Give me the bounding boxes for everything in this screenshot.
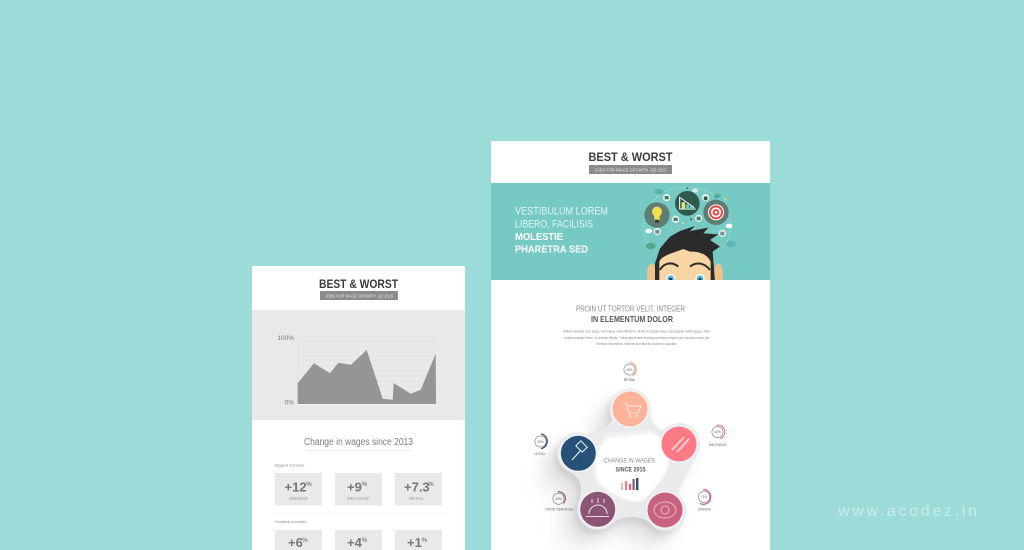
eyebrows xyxy=(660,263,710,270)
stat: drivers: +12 xyxy=(284,480,307,494)
hair xyxy=(655,226,720,282)
icon: chart badge xyxy=(675,191,700,216)
gauge: legal: LEGAL xyxy=(535,452,546,456)
chart panel background xyxy=(252,310,465,420)
area chart xyxy=(277,335,437,406)
node: legal gavel xyxy=(559,434,597,472)
cast shadow xyxy=(535,393,697,550)
heading: change in wages: Change in wages since 2013 xyxy=(304,437,413,448)
gauge: food services: 40% xyxy=(555,497,562,501)
eyes xyxy=(666,274,705,283)
stat: smallest three: % xyxy=(422,537,428,544)
panel: right card xyxy=(491,141,770,550)
gauge: retail: RETAIL xyxy=(624,378,635,382)
node: mechanic tools xyxy=(660,425,698,463)
heading: proin: PROIN UT TORTOR VELIT, INTEGER xyxy=(576,304,685,314)
icon: light bulb xyxy=(644,202,670,228)
hero text: PHARETRA SED xyxy=(515,244,588,256)
ears xyxy=(647,264,656,285)
heading: elementum: IN ELEMENTUM DOLOR xyxy=(591,314,673,324)
illustration: thinking character xyxy=(644,187,736,285)
gauge: retail xyxy=(624,362,636,382)
icon: target xyxy=(703,200,729,225)
gauge: driver: DRIVER xyxy=(698,508,711,512)
stat: smallest two xyxy=(335,530,382,550)
ring body xyxy=(557,389,700,531)
stat: mechanic xyxy=(335,473,382,506)
stat: retail xyxy=(395,473,442,506)
gauge: driver xyxy=(698,489,711,512)
stat: mechanic: MECHANIC xyxy=(347,496,370,501)
area chart: 100% xyxy=(277,335,294,342)
heading: left title: BEST & WORST xyxy=(319,277,399,291)
center label: SINCE 2015 xyxy=(616,466,646,474)
stat: drivers: % xyxy=(306,481,312,488)
stat: smallest two: % xyxy=(362,537,368,544)
paragraph: Nullam molestie arcu turpis, vel tempus nulla efficitur in. Morbi ut sodales lacus. Sed aliquet mattis augue. Nam xyxy=(563,330,710,334)
area chart: 0% xyxy=(285,400,294,406)
gauge: legal xyxy=(535,434,547,456)
stat: mechanic: +9 xyxy=(347,480,362,494)
full scene xyxy=(252,141,976,550)
stat: mechanic: % xyxy=(362,481,368,488)
node: retail cart xyxy=(611,390,649,428)
paragraph xyxy=(563,330,710,346)
gauge: mechanic: 60% xyxy=(714,430,721,434)
stat: retail: RETAIL xyxy=(409,496,424,501)
tag: right subtitle: JOBS FOR WAGE GROWTH -Q2 2015 xyxy=(594,168,667,173)
stat: drivers xyxy=(275,473,322,506)
tag: left subtitle: JOBS FOR WAGE GROWTH -Q2 2015 xyxy=(325,294,393,299)
hero text: LIBERO, FACILISIS xyxy=(515,218,593,230)
hero band xyxy=(491,183,770,280)
gauge: driver: 75% xyxy=(701,495,707,499)
stat: retail: % xyxy=(428,481,434,488)
gauge: legal: 50% xyxy=(537,440,544,444)
stat: drivers: DRIVERS xyxy=(289,496,308,501)
stat: smallest three: +1 xyxy=(407,535,422,550)
node: driver wheel xyxy=(646,491,684,529)
stat: smallest three xyxy=(395,530,442,550)
label: smallest increase: Smallest increase xyxy=(275,519,307,524)
gauge: food services xyxy=(546,492,574,512)
stat: smallest one xyxy=(275,530,322,550)
stat: retail: +7.3 xyxy=(404,480,430,494)
hero text: MOLESTIE xyxy=(515,231,563,243)
paragraph: inceptos himenaeos. Maecenas euismod at justo id vulputate. xyxy=(596,342,678,346)
paragraph: tempor tristique libero. In pulvinar efficitur. Class aptent taciti sociosqu ad litora torquent per conubia nostra, per xyxy=(564,336,710,340)
gauge: mechanic: MECHANIC xyxy=(709,443,728,447)
cover below hero xyxy=(491,280,770,550)
center label xyxy=(604,458,655,474)
heading: right title: BEST & WORST xyxy=(588,150,673,164)
node: food services cloche xyxy=(579,490,617,528)
gauge: food services: FOOD SERVICES xyxy=(546,508,574,512)
panel: left card xyxy=(252,266,465,550)
gauge: mechanic xyxy=(709,425,728,447)
stat: smallest two: +4 xyxy=(347,535,363,550)
tag: left subtitle xyxy=(320,291,398,300)
stat: smallest one: +6 xyxy=(288,535,303,550)
watermark: www.acodez.in xyxy=(837,503,977,520)
face xyxy=(659,249,711,282)
stat: smallest one: % xyxy=(302,537,308,544)
icon: small bubbles xyxy=(645,187,736,249)
hero text: VESTIBULUM LOREM xyxy=(515,206,608,218)
tag: right subtitle xyxy=(589,165,672,174)
ring inner opening xyxy=(592,429,670,504)
hero text xyxy=(515,206,608,256)
center label: CHANGE IN WAGES xyxy=(604,458,655,464)
gauge: retail: 45% xyxy=(626,368,633,372)
label: biggest increase: Biggest increase xyxy=(275,462,305,468)
mini bar chart xyxy=(621,478,638,490)
diagram: five-node ring xyxy=(535,389,700,550)
